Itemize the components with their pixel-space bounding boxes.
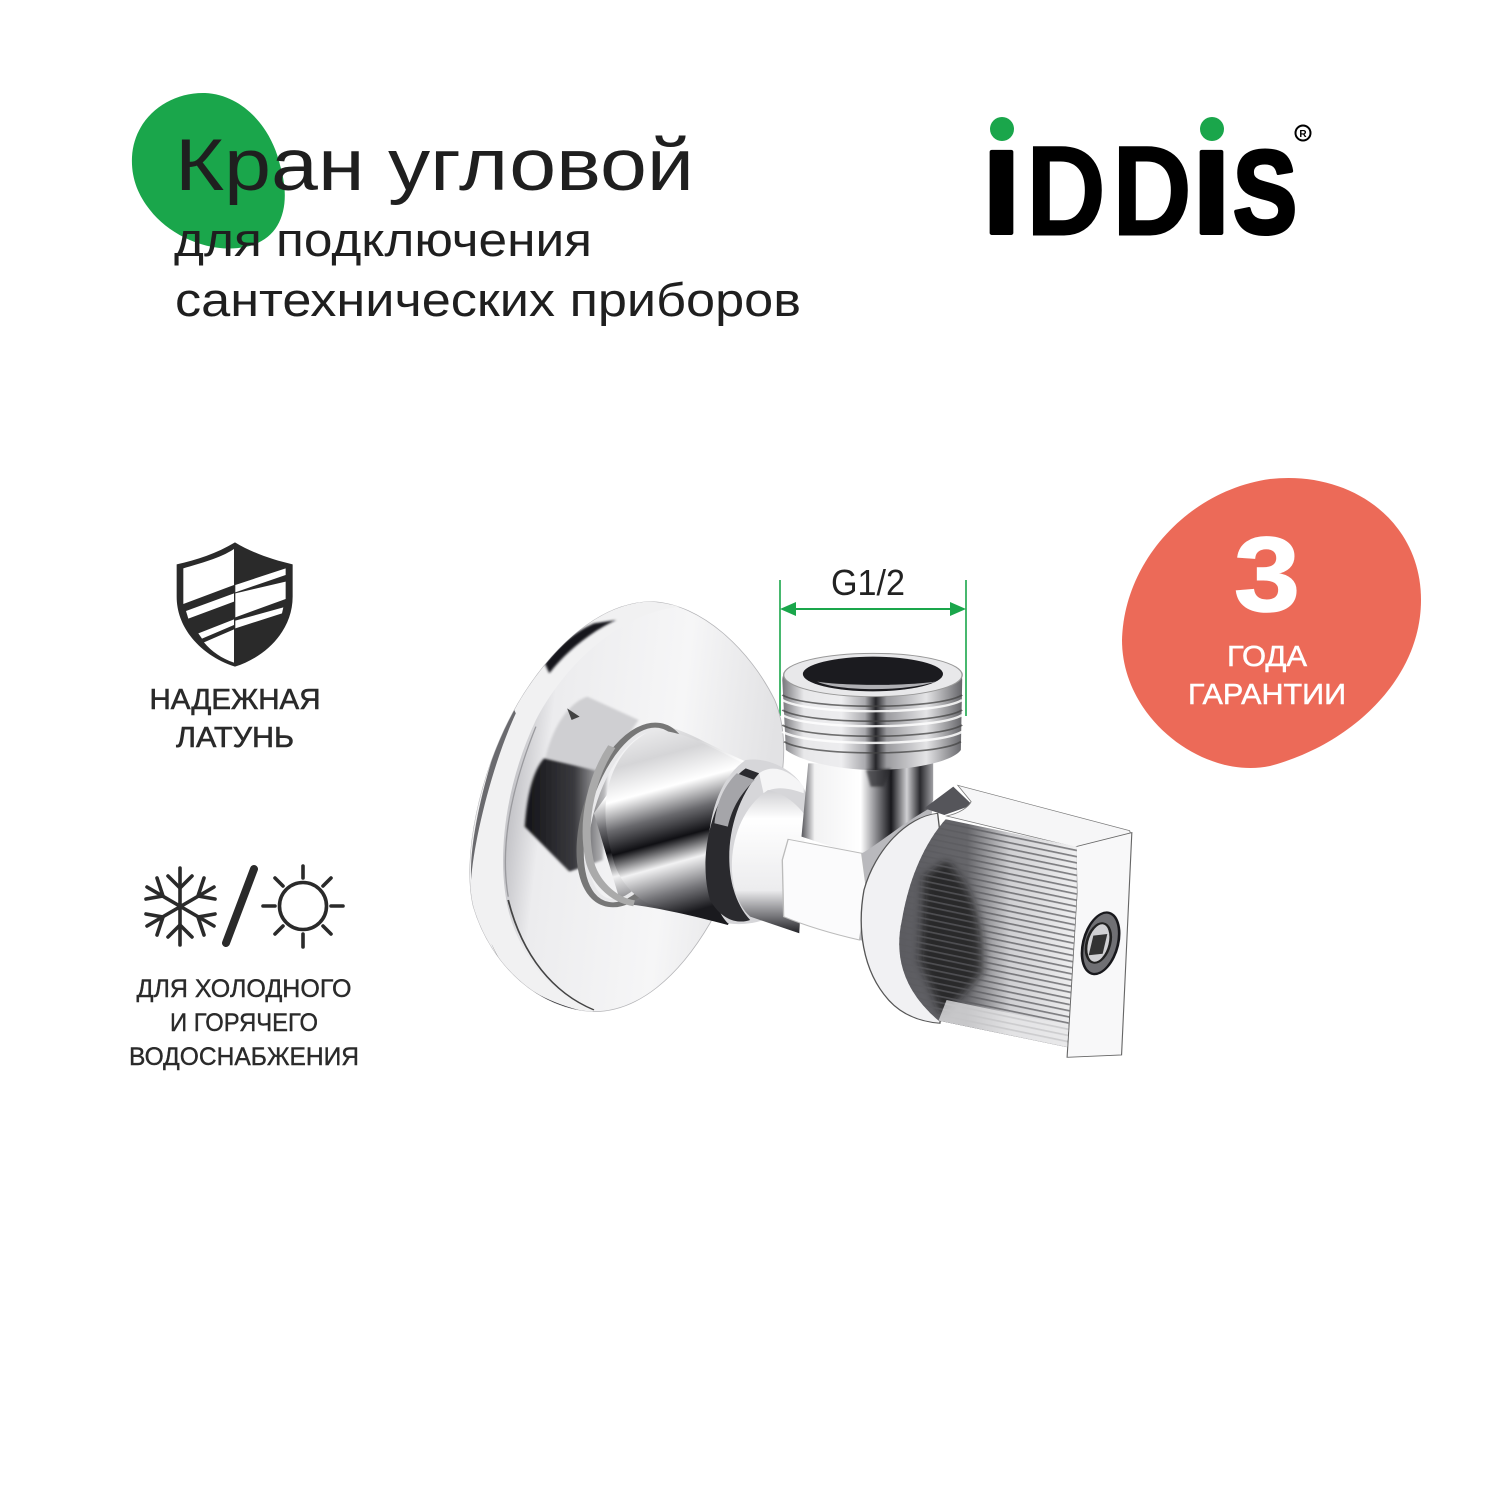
label: for cold and hot water <box>129 975 359 1071</box>
dimension G1/2 <box>780 562 966 716</box>
knob ribbed face <box>899 819 1077 1048</box>
icon: sun <box>263 866 343 947</box>
label: reliable brass <box>150 684 320 754</box>
subtitle: сантехнических приборов <box>175 273 801 326</box>
label: for cold and hot water: ВОДОСНАБЖЕНИЯ <box>129 1043 359 1071</box>
icon: shield <box>177 542 293 667</box>
valve body block <box>782 839 867 940</box>
label: reliable brass: ЛАТУНЬ <box>176 722 294 754</box>
title: Кран угловой <box>175 125 694 206</box>
subtitle <box>174 213 801 326</box>
angle valve product <box>470 602 1132 1057</box>
logo: IDDIS <box>983 117 1310 263</box>
knob top <box>947 785 1131 847</box>
green accent blob <box>132 93 285 249</box>
knob collar <box>861 813 951 1023</box>
icon: snowflake <box>146 868 215 945</box>
label: reliable brass: НАДЕЖНАЯ <box>150 684 320 716</box>
knob side <box>1067 833 1132 1057</box>
body dark side <box>860 807 933 942</box>
bell <box>705 760 806 924</box>
escutcheon cone <box>594 725 781 925</box>
thread <box>782 653 962 787</box>
logo: IDDIS: D <box>1112 120 1192 263</box>
icon: slash <box>226 869 254 943</box>
warranty badge <box>1122 478 1421 768</box>
logo: IDDIS: S <box>1233 127 1297 259</box>
logo: IDDIS: I <box>1193 127 1230 259</box>
warranty text: ГОДА <box>1227 641 1308 673</box>
ring inner cylinder <box>605 730 781 923</box>
warranty number: 3 <box>1234 516 1300 634</box>
label: for cold and hot water: И ГОРЯЧЕГО <box>170 1009 318 1037</box>
subtitle: для подключения <box>174 213 592 266</box>
label: for cold and hot water: ДЛЯ ХОЛОДНОГО <box>136 975 352 1003</box>
dimension G1/2: G1/2 <box>831 562 905 603</box>
knob screw <box>1075 909 1127 978</box>
neck <box>801 763 933 857</box>
warranty text: ГАРАНТИИ <box>1188 679 1346 711</box>
knob stem <box>924 787 972 815</box>
logo: IDDIS: I <box>983 127 1020 259</box>
logo: IDDIS: D <box>1026 120 1106 263</box>
warranty text <box>1188 641 1346 711</box>
logo: IDDIS: R <box>1299 129 1307 140</box>
flange <box>470 602 784 1012</box>
ring <box>563 720 705 910</box>
pipe <box>732 790 806 933</box>
